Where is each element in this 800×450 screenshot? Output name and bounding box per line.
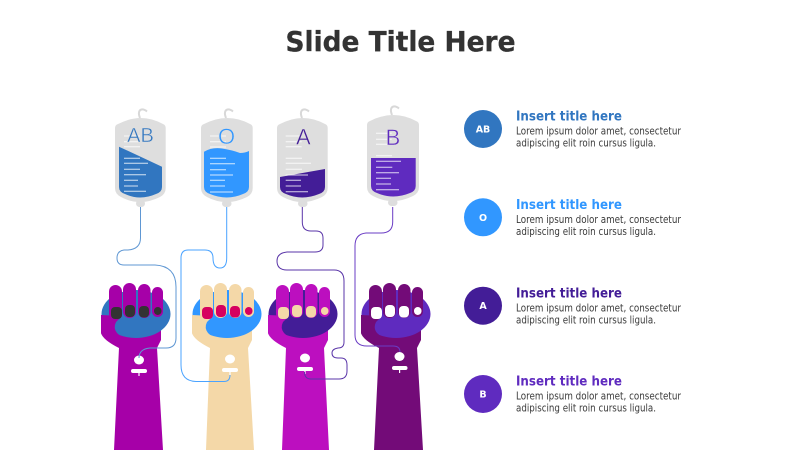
title: Slide Title Here [286,25,516,58]
IV bag: AB [115,109,166,207]
legend item: AB: Lorem ipsum dolor amet, consectetur [516,125,681,138]
legend item: B [464,375,681,414]
legend item: A: Insert title here [516,286,622,301]
IV bag: A: A [296,124,311,149]
tube: A [277,207,347,379]
legend item: A: Lorem ipsum dolor amet, consectetur [516,301,681,314]
legend item: O [464,198,681,238]
legend item: AB: Insert title here [516,110,622,125]
IV bag: AB: AB [127,125,154,147]
hand: AB recipient [101,283,170,450]
tube: O [181,207,230,382]
hand: B recipient [361,283,430,450]
legend item: O: O [479,213,487,224]
legend item: B: Insert title here [516,375,622,390]
legend item: AB: adipiscing elit roin cursus ligula. [516,137,656,150]
legend item: B: Lorem ipsum dolor amet, consectetur [516,390,681,402]
legend item: O: Insert title here [516,198,622,213]
hand: A recipient [268,283,338,450]
legend item: B: adipiscing elit roin cursus ligula. [516,402,656,414]
legend item: AB [464,110,681,150]
legend item: O: adipiscing elit roin cursus ligula. [516,225,656,238]
IV bag: B [367,106,419,206]
legend item: O: Lorem ipsum dolor amet, consectetur [516,213,681,226]
hand: O recipient [192,283,262,450]
tube: AB [117,207,176,358]
legend item: A [464,286,681,326]
IV bag: A [277,109,328,207]
legend item: A: adipiscing elit roin cursus ligula. [516,313,656,326]
tube: B [355,207,400,352]
IV bag: O [201,109,253,207]
legend item: AB: AB [476,124,490,136]
IV bag: B: B [386,125,400,150]
legend item: A: A [479,301,487,312]
legend item: B: B [479,390,487,400]
IV bag: O: O [218,124,235,149]
